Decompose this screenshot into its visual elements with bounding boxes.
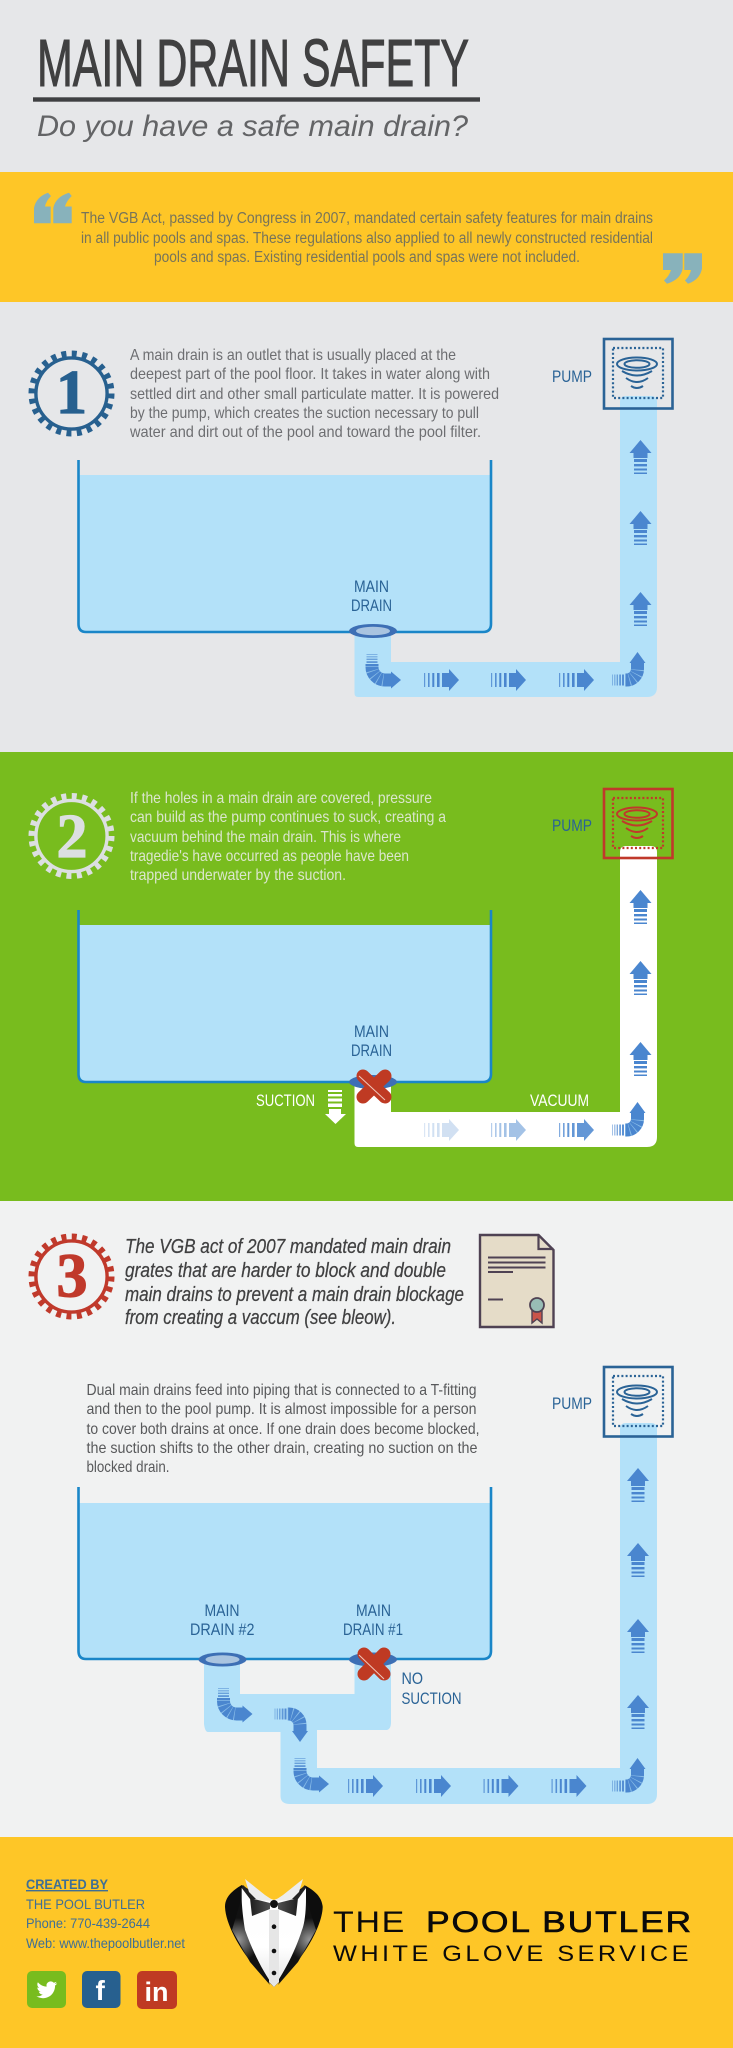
text block: step 1: deepest part of the pool floor. It takes in water along with <box>130 366 490 383</box>
icon: main drain 1 blocked with X <box>349 1652 397 1679</box>
panel: step 2 blocked drain <box>0 752 733 1201</box>
pipe: dual drains to pump <box>204 1423 657 1804</box>
label: no suction <box>402 1670 462 1708</box>
panel: page header <box>0 0 733 172</box>
heading: VGB act statement <box>125 1235 464 1329</box>
heading: VGB act statement: main drains to prevent a main drain blockage <box>125 1283 464 1306</box>
label: main drain 1 <box>343 1602 403 1639</box>
quote text: pools and spas. Existing residential pools and spas were not included. <box>154 249 580 266</box>
text block: dual drains: Dual main drains feed into piping that is connected to a T-fitting <box>86 1382 476 1399</box>
pool: water basin <box>78 1487 491 1659</box>
label: main drain 1: DRAIN #1 <box>343 1621 403 1639</box>
label: no suction: SUCTION <box>402 1690 462 1708</box>
text block: credits: Web: www.thepoolbutler.net <box>26 1935 185 1951</box>
label: no suction: NO <box>402 1670 423 1688</box>
pipe: drain to pump <box>354 396 657 697</box>
label: main drain 1: MAIN <box>356 1602 391 1620</box>
text block: dual drains: the suction shifts to the other drain, creating no suction on the <box>86 1440 478 1457</box>
subtitle: Do you have a safe main drain? <box>37 110 468 143</box>
label: pump: PUMP <box>552 1395 592 1413</box>
icon: pump <box>604 1367 672 1436</box>
icon: blocked drain grate with X <box>349 1075 397 1100</box>
label: pump: PUMP <box>552 817 592 835</box>
label: main drain: DRAIN <box>351 597 392 615</box>
text block: step 1: water and dirt out of the pool and toward the pool filter. <box>129 424 481 441</box>
pipe: vacuum white pipe <box>354 846 657 1147</box>
heading: VGB act statement: from creating a vaccum (see bleow). <box>125 1306 396 1329</box>
logo text: The Pool Butler <box>333 1906 693 1966</box>
label: pump: PUMP <box>552 368 592 386</box>
icon: main drain grate <box>349 624 397 638</box>
label: main drain: DRAIN <box>351 1042 392 1060</box>
label: suction: SUCTION <box>256 1092 315 1110</box>
pool: water basin <box>78 910 491 1082</box>
icon: pump <box>604 339 672 408</box>
icon: tuxedo logo <box>225 1879 323 1987</box>
text block: credits: CREATED BY <box>26 1876 109 1892</box>
icon: linkedin <box>137 1971 177 2009</box>
text block: dual drains <box>86 1382 480 1476</box>
arrow: suction down <box>325 1090 346 1124</box>
icon: linkedin: in <box>144 1977 168 2007</box>
arrows: water flow along pipes <box>218 1468 649 1797</box>
heading: VGB act statement: grates that are harder to block and double <box>125 1259 446 1282</box>
text block: dual drains: to cover both drains at once. If one drain does become blocked, <box>86 1421 480 1438</box>
icon: closing quote mark <box>663 253 702 284</box>
text block: step 1 <box>129 347 499 441</box>
quote text: in all public pools and spas. These regulations also applied to all newly constructed residential <box>81 230 653 247</box>
text block: credits <box>26 1876 185 1951</box>
badge: number 3 gear <box>32 1236 112 1316</box>
icon: facebook: f <box>96 1975 106 2006</box>
text block: step 2: vacuum behind the main drain. This is where <box>130 829 401 846</box>
text block: step 1: settled dirt and other small particulate matter. It is powered <box>130 386 499 403</box>
label: main drain 2: DRAIN #2 <box>190 1621 254 1639</box>
quote text <box>81 210 653 266</box>
label: vacuum: VACUUM <box>530 1092 589 1110</box>
icon: opening quote mark <box>34 193 72 223</box>
text block: dual drains: and then to the pool pump. It is almost impossible for a person <box>86 1401 476 1418</box>
text block: step 2: can build as the pump continues to suck, creating a <box>130 809 446 826</box>
text block: step 2: trapped underwater by the suction. <box>130 867 346 884</box>
panel: step 1 main drain explained <box>0 302 733 752</box>
icon: red pump <box>604 789 672 858</box>
label: main drain <box>351 1023 392 1060</box>
badge: number 3 gear: 3 <box>56 1242 88 1310</box>
text block: step 2: If the holes in a main drain are covered, pressure <box>130 790 432 807</box>
text block: dual drains: blocked drain. <box>86 1459 170 1476</box>
text block: credits: Phone: 770-439-2644 <box>26 1915 150 1931</box>
panel: step 3 dual drains <box>0 1201 733 1837</box>
badge: number 1 gear <box>32 354 112 434</box>
icon: twitter <box>27 1971 66 2008</box>
icon: certificate document <box>480 1235 554 1327</box>
text block: step 2: tragedie's have occurred as people have been <box>130 848 409 865</box>
label: main drain 2 <box>190 1602 254 1639</box>
icon: main drain 2 grate <box>198 1652 246 1666</box>
icon: facebook <box>82 1971 120 2008</box>
logo text: The Pool Butler: WHITE GLOVE SERVICE <box>333 1941 692 1966</box>
label: main drain: MAIN <box>354 578 389 596</box>
text block: step 1: A main drain is an outlet that is usually placed at the <box>130 347 456 364</box>
label: main drain <box>351 578 392 615</box>
badge: number 2 gear <box>32 796 112 876</box>
text block: step 2 <box>130 790 446 884</box>
badge: number 2 gear: 2 <box>56 803 88 871</box>
label: main drain: MAIN <box>354 1023 389 1041</box>
panel: footer <box>0 1837 733 2048</box>
title: MAIN DRAIN SAFETY <box>37 26 469 101</box>
arrows: fading flow along pipe <box>424 890 652 1141</box>
arrows: water flow along pipe <box>366 440 652 691</box>
text block: step 1: by the pump, which creates the suction necessary to pull <box>130 405 479 422</box>
label: main drain 2: MAIN <box>204 1602 240 1620</box>
pool: water basin <box>78 460 491 632</box>
heading: VGB act statement: The VGB act of 2007 mandated main drain <box>125 1235 451 1258</box>
logo text: The Pool Butler: THE <box>333 1906 406 1939</box>
text block: credits: THE POOL BUTLER <box>26 1896 145 1912</box>
panel: VGB Act quote banner <box>0 172 733 302</box>
logo text: The Pool Butler: POOL BUTLER <box>426 1906 693 1939</box>
badge: number 1 gear: 1 <box>56 359 87 427</box>
quote text: The VGB Act, passed by Congress in 2007, mandated certain safety features for main drains <box>81 210 653 227</box>
